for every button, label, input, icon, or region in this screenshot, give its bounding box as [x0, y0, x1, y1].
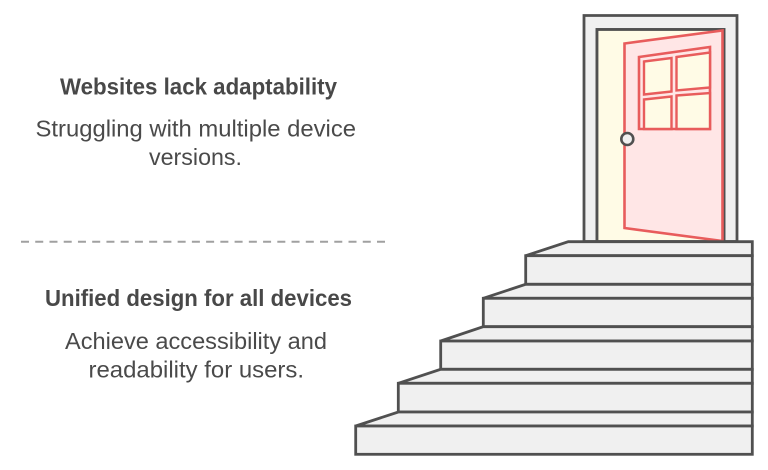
text block: achieve accessibility [65, 328, 327, 382]
text block: struggling: versions. [149, 144, 242, 170]
text block: achieve accessibility: readability for users. [88, 356, 304, 382]
heading: unified design: Unified design for all devices [45, 285, 352, 311]
text block: struggling [36, 116, 356, 170]
doorway opening [597, 30, 724, 242]
step 2 [483, 284, 752, 327]
step 3 [441, 327, 752, 369]
text block: achieve accessibility: Achieve accessibility and [65, 328, 327, 354]
text block: struggling: Struggling with multiple device [36, 116, 356, 142]
door window [639, 47, 710, 129]
step 4 [398, 369, 752, 412]
door frame [584, 16, 737, 242]
heading: websites lack adaptability: Websites lack adaptability [60, 73, 337, 99]
door leaf [624, 30, 722, 241]
step 5 [356, 412, 752, 454]
icon: door [584, 16, 737, 242]
staircase [356, 242, 752, 454]
step 1 [526, 242, 752, 284]
door knob [621, 133, 633, 145]
